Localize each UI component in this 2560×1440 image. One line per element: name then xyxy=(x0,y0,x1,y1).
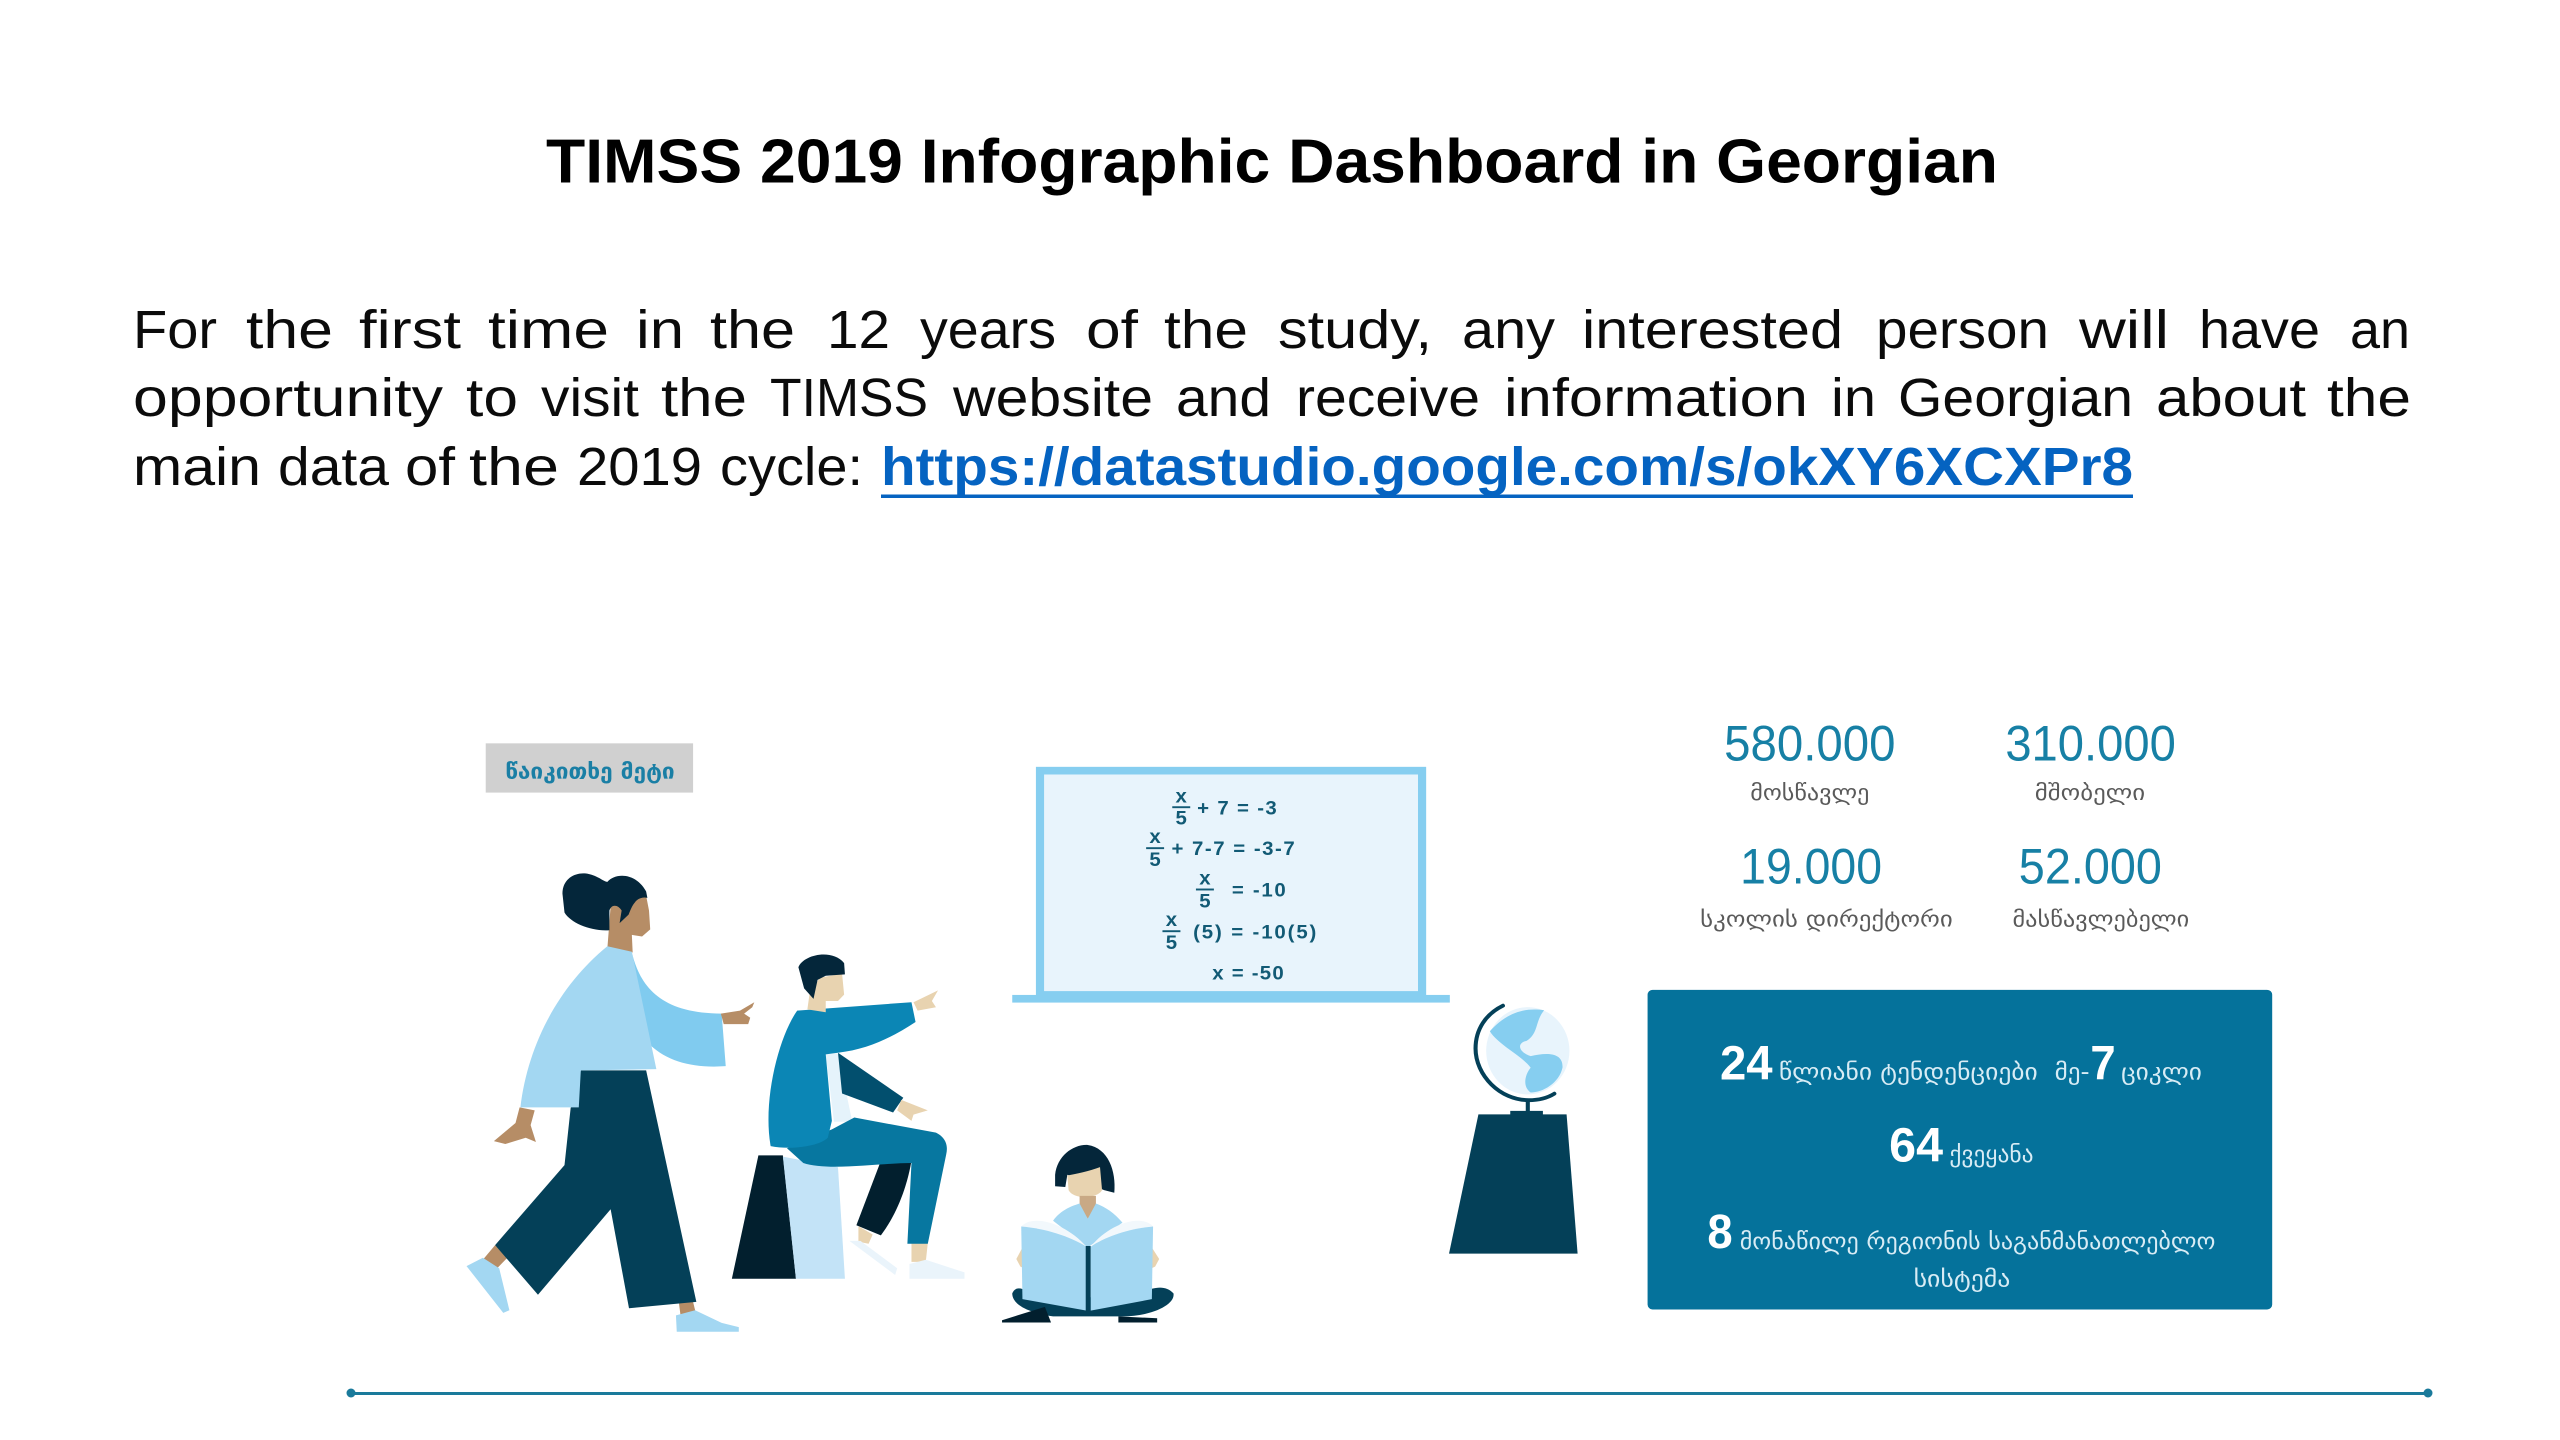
stat: parents: მშობელი xyxy=(2035,780,2145,806)
stat: principals xyxy=(1700,838,1953,932)
paragraph line 2: Georgian xyxy=(1898,368,2133,428)
paragraph line 2: visit xyxy=(541,368,639,428)
globe on pedestal xyxy=(1449,1006,1578,1254)
stat: principals: სკოლის დირექტორი xyxy=(1700,907,1953,932)
paragraph line 3 with link: the xyxy=(469,437,559,497)
paragraph line 2: TIMSS xyxy=(770,368,928,428)
girl reading book xyxy=(1002,1145,1174,1323)
stat: parents: 310.000 xyxy=(2005,715,2176,771)
paragraph line 1: interested xyxy=(1582,300,1843,360)
fact: 24-year trends, 7th cycle: ციკლი xyxy=(2121,1059,2202,1086)
panel: study facts xyxy=(1648,990,2272,1309)
fact: 24-year trends, 7th cycle: მე- xyxy=(2055,1059,2090,1086)
man seated on stool xyxy=(732,955,965,1279)
blackboard with equations: = -10 xyxy=(1232,880,1286,901)
blackboard with equations: 5 xyxy=(1199,891,1211,913)
stat: students: 580.000 xyxy=(1724,715,1895,771)
stat: teachers xyxy=(2012,838,2189,932)
illustration: board, girl and globe xyxy=(1002,771,1578,1323)
paragraph line 2: in xyxy=(1831,368,1876,428)
blackboard with equations: x xyxy=(1199,868,1211,889)
blackboard with equations: 5 xyxy=(1149,850,1161,871)
paragraph line 1: study, xyxy=(1278,300,1432,360)
stat: students: მოსწავლე xyxy=(1750,780,1869,806)
paragraph line 3 with link xyxy=(133,437,2133,498)
paragraph line 2: about xyxy=(2156,368,2306,428)
paragraph line 1: 12 xyxy=(827,300,890,360)
stat: principals: 19.000 xyxy=(1740,838,1882,895)
illustration: people xyxy=(467,743,965,1332)
paragraph line 2: receive xyxy=(1296,368,1480,428)
paragraph line 2: the xyxy=(661,368,747,428)
paragraph line 1 xyxy=(133,300,2410,360)
paragraph line 3 with link: of xyxy=(405,437,456,497)
fact: 24-year trends, 7th cycle xyxy=(1720,1037,2202,1090)
paragraph line 1: the xyxy=(710,300,795,360)
fact: 64 countries: 64 xyxy=(1889,1119,1943,1172)
fact: 24-year trends, 7th cycle: 24 xyxy=(1720,1037,1773,1090)
paragraph line 3 with link: main xyxy=(133,437,261,497)
title: TIMSS 2019 Infographic Dashboard in Georgian xyxy=(546,128,1998,196)
paragraph line 3 with link: data xyxy=(278,437,390,497)
blackboard with equations: x = -50 xyxy=(1212,963,1284,984)
fact: 8 benchmarking systems xyxy=(1707,1206,2215,1292)
fact: 8 benchmarking systems: მონაწილე რეგიონის საგანმანათლებლო xyxy=(1740,1228,2215,1255)
stat: teachers: მასწავლებელი xyxy=(2012,907,2189,932)
fact: 24-year trends, 7th cycle: წლიანი ტენდენციები xyxy=(1779,1059,2038,1086)
blackboard with equations: + 7 = -3 xyxy=(1197,798,1277,819)
fact: 64 countries xyxy=(1889,1119,2034,1172)
read more button xyxy=(486,743,693,793)
paragraph line 1: will xyxy=(2078,300,2169,360)
paragraph line 2: website xyxy=(952,368,1153,428)
paragraph line 1: an xyxy=(2350,300,2410,360)
paragraph line 1: time xyxy=(488,300,609,360)
blackboard with equations xyxy=(1012,771,1450,1003)
blackboard with equations: x xyxy=(1176,786,1187,807)
paragraph line 1: the xyxy=(1164,300,1248,360)
paragraph line 2: information xyxy=(1504,368,1808,428)
woman walking xyxy=(467,873,754,1332)
statistics xyxy=(1648,715,2272,1309)
paragraph line 1: in xyxy=(636,300,684,360)
paragraph line 3 with link: cycle: xyxy=(720,437,863,497)
blackboard with equations: x xyxy=(1149,827,1161,848)
paragraph line 1: years xyxy=(920,300,1056,360)
stat: parents xyxy=(2005,715,2176,806)
paragraph line 2: opportunity xyxy=(133,368,443,428)
stat: teachers: 52.000 xyxy=(2019,838,2162,895)
paragraph line 2: the xyxy=(2327,368,2411,428)
paragraph line 2: and xyxy=(1176,368,1271,428)
blackboard with equations: (5) = -10(5) xyxy=(1193,922,1316,943)
fact: 8 benchmarking systems: 8 xyxy=(1707,1206,1733,1259)
paragraph line 1: For xyxy=(133,300,217,360)
paragraph line 1: first xyxy=(359,300,461,360)
paragraph line 1: any xyxy=(1462,300,1555,360)
fact: 64 countries: ქვეყანა xyxy=(1949,1141,2034,1168)
blackboard with equations: x xyxy=(1166,910,1177,931)
stat: students xyxy=(1724,715,1895,806)
fact: 24-year trends, 7th cycle: 7 xyxy=(2090,1037,2116,1090)
paragraph line 2: to xyxy=(466,368,518,428)
paragraph line 3 with link: https://datastudio.google.com/s/okXY6XCXPr8 xyxy=(881,437,2133,497)
blackboard with equations: 5 xyxy=(1166,933,1177,954)
paragraph line 1: the xyxy=(246,300,333,360)
paragraph line 2 xyxy=(133,368,2411,428)
paragraph line 1: of xyxy=(1086,300,1139,360)
fact: 8 benchmarking systems: სისტემა xyxy=(1914,1266,2010,1292)
blackboard with equations: + 7-7 = -3-7 xyxy=(1171,839,1295,860)
blackboard with equations: 5 xyxy=(1176,808,1187,829)
read more button: წაიკითხე მეტი xyxy=(505,759,675,783)
paragraph line 1: person xyxy=(1876,300,2049,360)
paragraph line 1: have xyxy=(2199,300,2320,360)
paragraph line 3 with link: 2019 xyxy=(577,437,702,497)
intro paragraph xyxy=(133,300,2411,498)
